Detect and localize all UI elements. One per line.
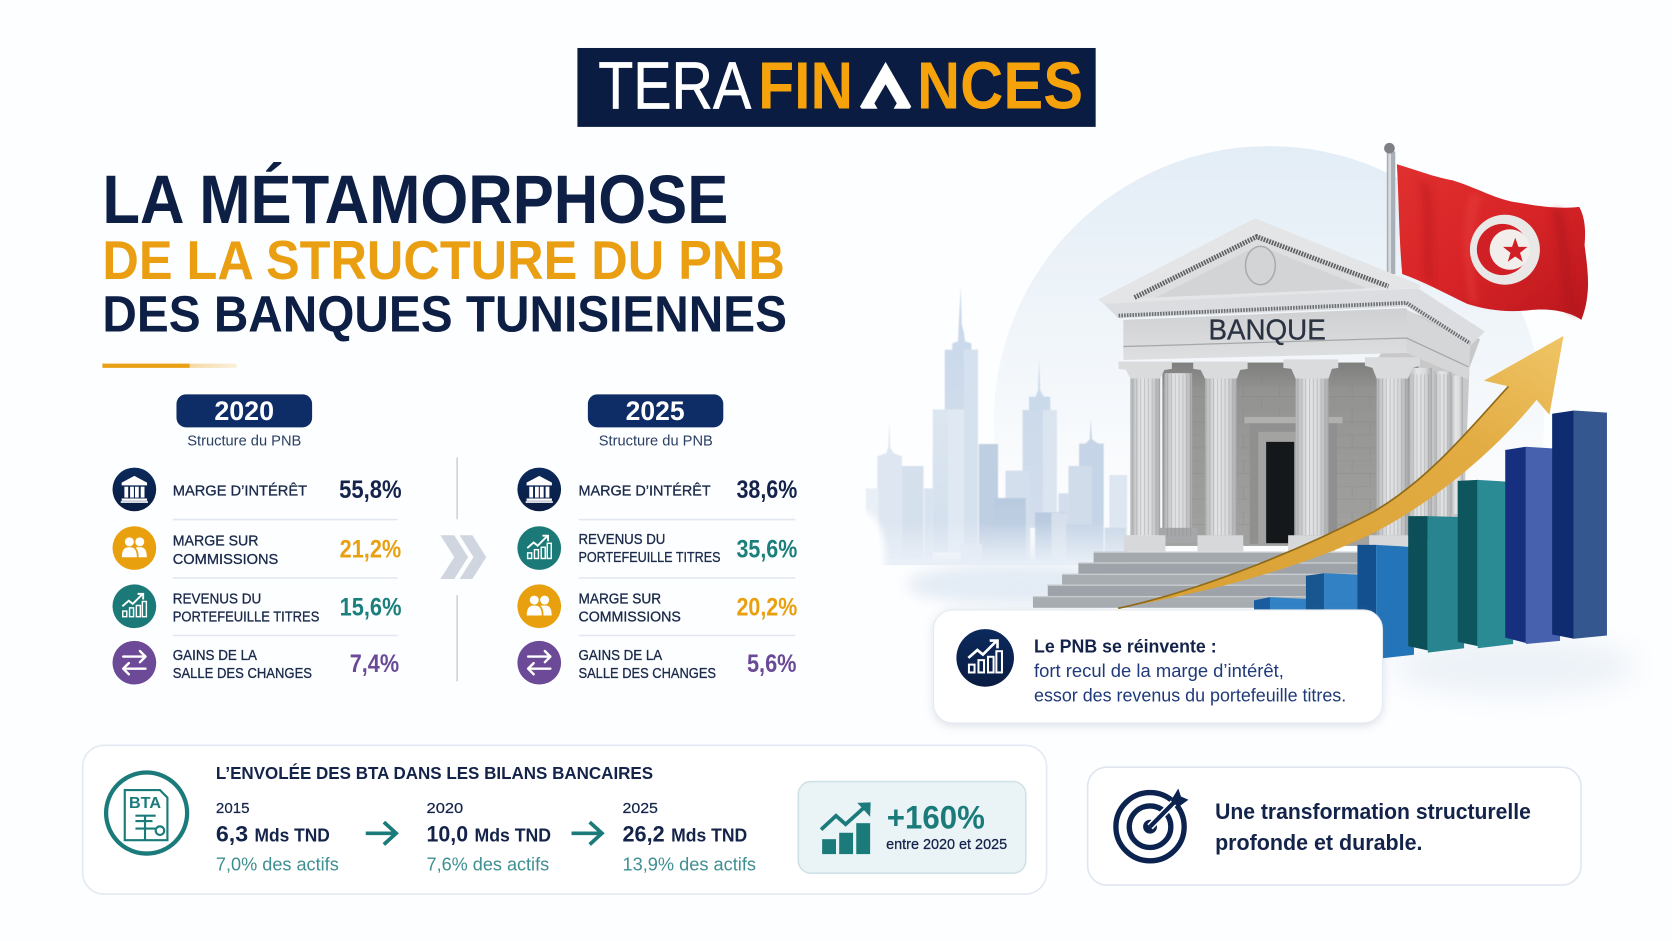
stat 2015: 6,3 [216,822,248,847]
title: DES BANQUES TUNISIENNES [102,286,787,343]
row: revenus du portefeuille titres: 35,6% [737,537,797,564]
row: gains de la salle des changes [112,641,399,685]
title: LA MÉTAMORPHOSE [102,162,728,238]
panel: transformation structurelle [1088,767,1581,885]
callout: +160% [798,782,1026,873]
row: marge sur commissions [112,526,401,570]
row: marge sur commissions: 21,2% [340,537,401,564]
callout: le PNB se réinvente: essor des revenus du portefeuille titres. [1034,685,1346,705]
callout: +160%: +160% [887,800,985,836]
stat 2025 [623,800,756,875]
row: marge sur commissions: MARGE SUR [173,533,259,550]
logo: TERAFINANCES: FIN [758,49,853,124]
icon: growth chart [821,802,871,854]
pale circle backdrop [994,146,1544,696]
right side wall [1376,310,1480,544]
panel: transformation structurelle: profonde et durable. [1215,830,1422,855]
logo: TERAFINANCES: TERA [598,49,751,124]
skyline fade left [834,510,885,599]
illustration: bank, flag, arrow and bars [834,143,1637,696]
2025 badge [588,394,723,427]
callout: le PNB se réinvente [934,610,1382,723]
stat 2015 [216,800,339,875]
2020 subtitle: Structure du PNB [187,432,301,449]
cornice [1103,288,1485,346]
panel: envolée des BTA [83,745,1047,894]
stat 2020 [427,800,551,875]
steps [1033,552,1364,608]
floor reflection [1392,639,1637,694]
stat 2025: 26,2 [623,822,665,847]
stat 2015: Mds TND [255,826,330,846]
pediment [1098,218,1420,304]
row: gains de la salle des changes: SALLE DES CHANGES [578,665,716,682]
row: marge d'intérêt [517,468,797,511]
bank building [1033,218,1485,608]
row: revenus du portefeuille titres [517,526,797,570]
row: marge sur commissions [517,584,797,628]
2020 badge: 2020 [214,396,274,426]
skyline mist [877,522,1127,565]
row: revenus du portefeuille titres: PORTEFEUILLE TITRES [173,609,319,626]
stylised A [860,62,911,109]
row: revenus du portefeuille titres [112,584,402,628]
panel: 2025 structure [517,394,797,685]
row: marge d'intérêt [112,468,402,511]
row: marge sur commissions: COMMISSIONS [578,609,681,626]
stat 2020: 7,6% des actifs [427,855,549,875]
row: revenus du portefeuille titres: REVENUS DU [173,591,261,608]
bar chart [1254,411,1607,659]
arrow: chevrons 2020 to 2025 [440,535,486,579]
back wall [1162,363,1418,546]
stat 2025: Mds TND [671,826,747,846]
title [102,162,787,343]
row: marge d'intérêt: 38,6% [737,477,797,504]
row: gains de la salle des changes: GAINS DE LA [173,647,257,664]
icon: BTA document [106,773,187,854]
row: gains de la salle des changes [517,641,797,685]
flag pole [1384,143,1395,274]
row: revenus du portefeuille titres: 15,6% [340,595,402,622]
panel: 2020 structure [112,394,402,685]
callout: le PNB se réinvente: fort recul de la marge d’intérêt, [1034,661,1284,681]
entablature [1123,308,1406,360]
2020 badge [176,394,312,427]
panel heading: L’ENVOLÉE DES BTA DANS LES BILANS BANCAIRES [216,762,653,783]
2025 badge: 2025 [626,396,685,426]
stat 2025: 13,9% des actifs [623,855,756,875]
row: gains de la salle des changes: 5,6% [747,651,797,678]
columns [1119,357,1463,551]
callout: le PNB se réinvente: Le PNB se réinvente : [1034,636,1217,656]
row: marge sur commissions: 20,2% [737,595,797,622]
row: marge sur commissions: COMMISSIONS [173,551,278,568]
row: gains de la salle des changes: 7,4% [350,651,399,678]
row: gains de la salle des changes: SALLE DES CHANGES [173,665,312,682]
city skyline [866,287,1127,563]
row: revenus du portefeuille titres: PORTEFEUILLE TITRES [578,549,721,566]
row: gains de la salle des changes: GAINS DE LA [578,647,662,664]
icon: chart [956,629,1014,687]
stat 2020: Mds TND [475,826,551,846]
stat 2025: 2025 [623,800,658,817]
stat 2015: 2015 [216,800,250,817]
row: marge sur commissions: MARGE SUR [578,591,661,608]
BANQUE inscription: BANQUE [1208,315,1326,347]
logo: TERAFINANCES [577,48,1096,127]
flag of Tunisia [1397,164,1588,320]
rising gold arrow [1118,336,1564,608]
callout: +160%: entre 2020 et 2025 [886,837,1007,853]
panel: transformation structurelle: Une transformation structurelle [1215,799,1531,824]
row: marge d'intérêt: MARGE D’INTÉRÊT [173,482,307,499]
row: marge d'intérêt: 55,8% [339,477,402,504]
title underline [102,364,237,368]
stat 2020: 2020 [427,800,463,817]
title: DE LA STRUCTURE DU PNB [102,230,785,291]
icon: BTA document: BTA [129,795,161,812]
arrow [572,822,602,845]
stat 2015: 7,0% des actifs [216,855,339,875]
door [1244,417,1343,544]
stat 2020: 10,0 [427,822,468,847]
logo: TERAFINANCES: NCES [917,49,1083,124]
row: revenus du portefeuille titres: REVENUS DU [578,531,665,548]
water [906,564,1130,605]
icon: target with arrow [1116,789,1188,861]
2025 subtitle: Structure du PNB [599,432,713,449]
row: marge d'intérêt: MARGE D’INTÉRÊT [578,482,711,499]
dentil bands [1119,303,1470,343]
arrow [366,822,396,845]
